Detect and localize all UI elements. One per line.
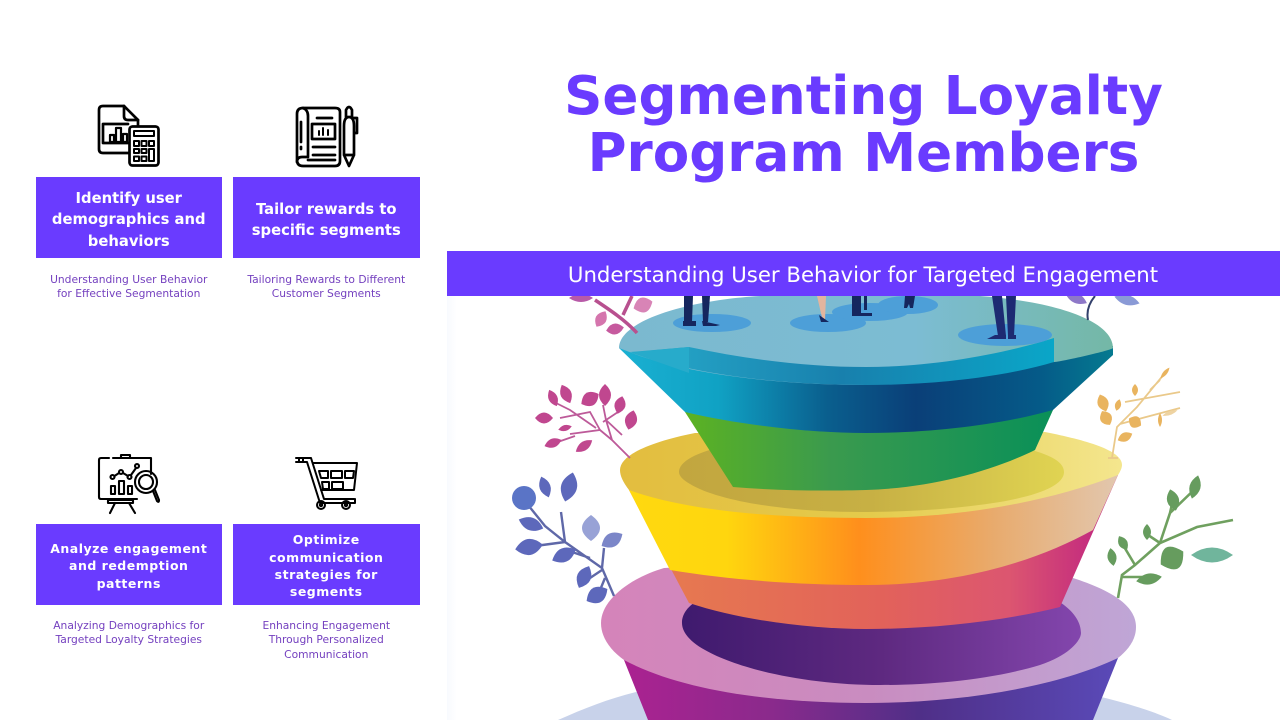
tier: top blue disc [619, 296, 1113, 433]
caption: tailoring rewards: Customer Segments [272, 287, 381, 300]
caption: analyzing demographics: Analyzing Demographics for [53, 618, 204, 632]
plant: magenta branch [535, 383, 639, 458]
card: tailor rewards [233, 176, 420, 258]
caption: enhancing engagement: Enhancing Engagement [262, 618, 390, 632]
tier: bottom purple cone [601, 563, 1136, 720]
tier: green neck [685, 400, 1053, 491]
caption: enhancing engagement: Through Personalized [269, 633, 384, 646]
caption: user behavior: Understanding User Behavior [50, 272, 207, 286]
plant: blue branch [512, 470, 626, 608]
plant: top right branch [1063, 288, 1141, 320]
caption: tailoring rewards: Tailoring Rewards to Different [247, 272, 405, 286]
card: identify user demographics: Identify user [76, 190, 182, 207]
caption: enhancing engagement [262, 618, 390, 661]
title [564, 65, 1163, 184]
card: optimize communication [233, 524, 420, 604]
subtitle banner [447, 251, 1280, 296]
caption: analyzing demographics [53, 618, 204, 646]
card: analyze engagement: Analyze engagement [50, 541, 207, 556]
tier: middle orange and yellow [620, 432, 1122, 629]
plant: green branch [1106, 474, 1233, 598]
subtitle banner: Understanding User Behavior for Targeted Engagement [568, 263, 1158, 288]
card: tailor rewards: Tailor rewards to [256, 201, 397, 218]
icon: report and calculator [98, 104, 160, 167]
caption: analyzing demographics: Targeted Loyalty Strategies [56, 633, 202, 646]
card: analyze engagement: patterns [97, 576, 161, 591]
card: analyze engagement: and redemption [69, 558, 188, 573]
plant: gold branch [1095, 366, 1180, 458]
card: identify user demographics: demographics and [52, 211, 206, 228]
card: optimize communication: Optimize [293, 532, 360, 547]
figures standing on top disc [673, 296, 1052, 346]
funnel illustration [512, 296, 1234, 720]
card: identify user demographics [36, 176, 222, 258]
card: optimize communication: communication [269, 550, 383, 565]
card: optimize communication: segments [290, 584, 363, 599]
card: optimize communication: strategies for [275, 567, 378, 582]
card: analyze engagement [36, 524, 222, 604]
base plate [558, 691, 1172, 720]
caption: user behavior: for Effective Segmentation [57, 287, 200, 300]
title: Segmenting Loyalty [564, 65, 1163, 127]
card: tailor rewards: specific segments [252, 222, 401, 239]
caption: enhancing engagement: Communication [284, 648, 368, 661]
caption: user behavior [50, 272, 208, 300]
icon: book and pen [296, 106, 358, 168]
plant: top pink branch [569, 294, 655, 336]
card: identify user demographics: behaviors [88, 233, 170, 250]
title: Program Members [588, 122, 1139, 184]
icon: presentation board with magnifier [98, 454, 160, 514]
caption: tailoring rewards [247, 272, 405, 300]
icon: shopping cart [295, 457, 358, 510]
